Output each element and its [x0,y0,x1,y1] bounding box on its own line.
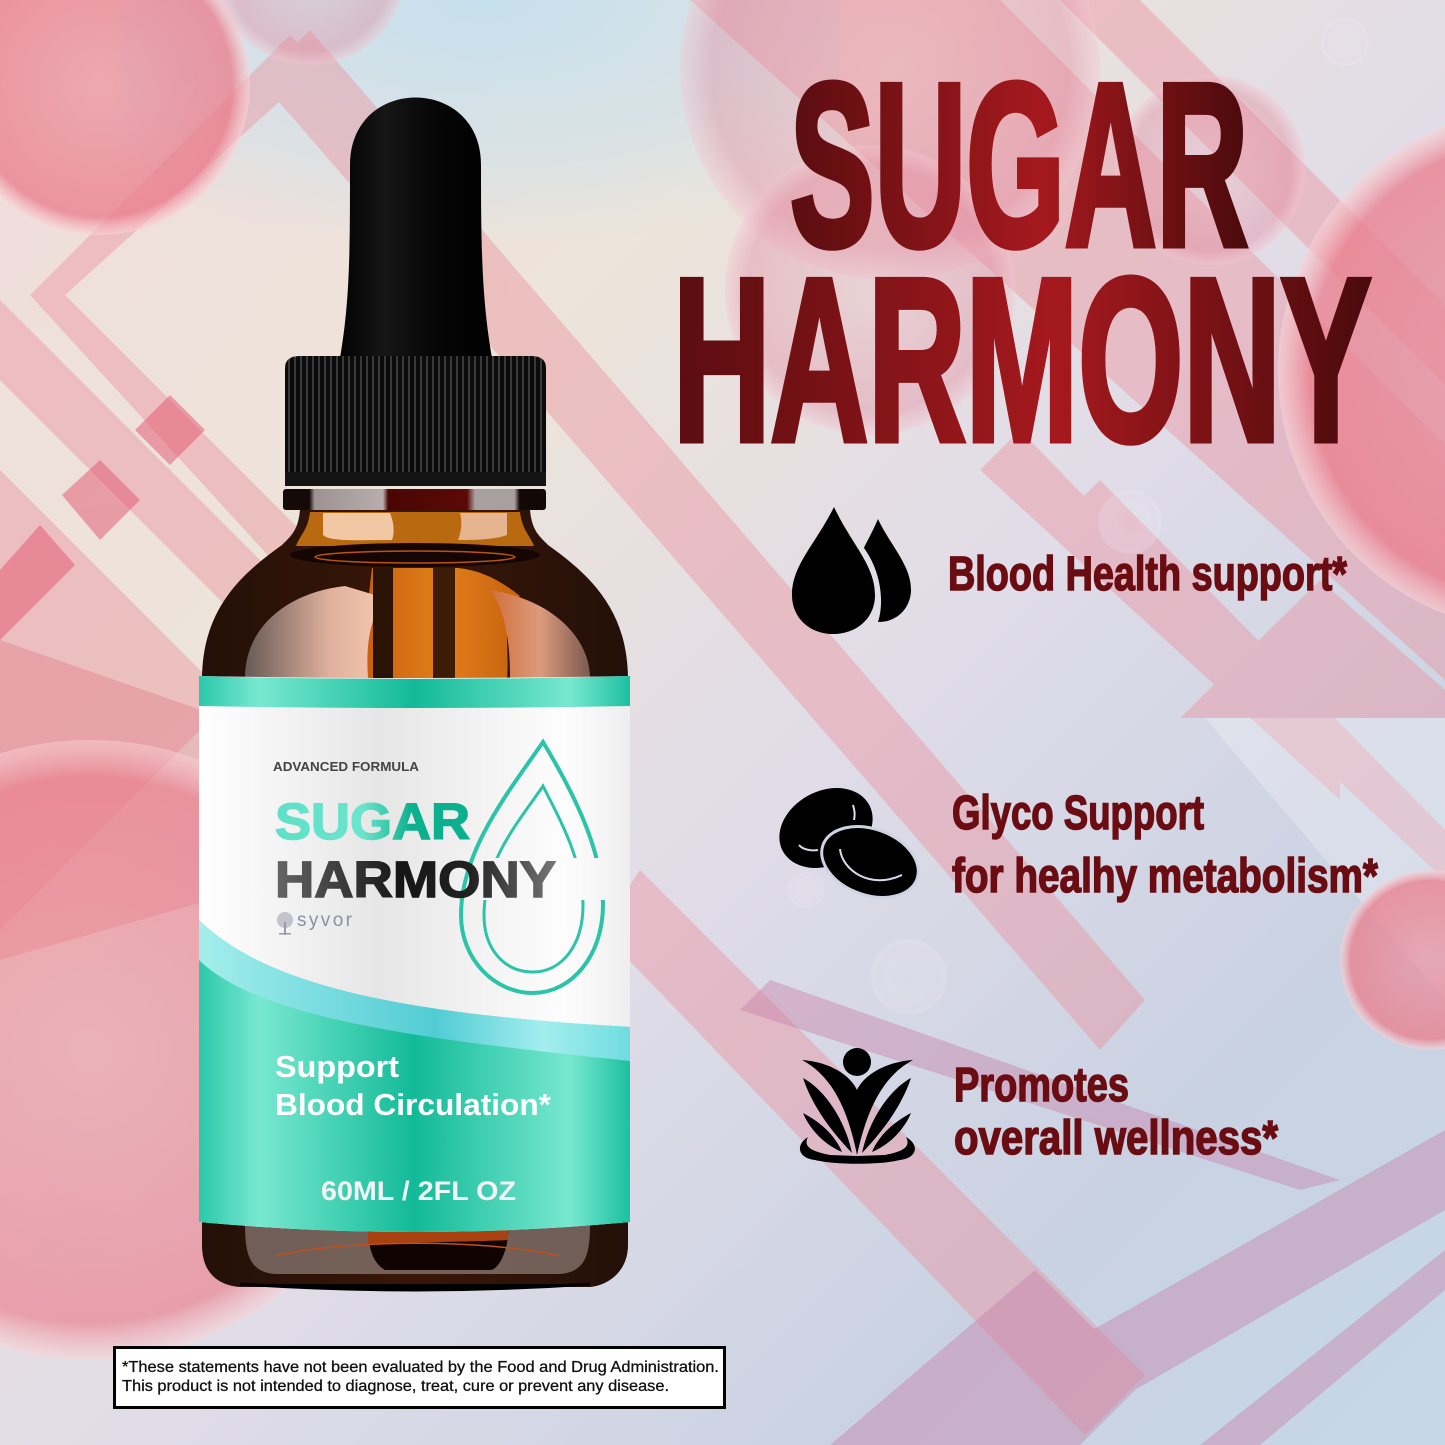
label drop logo [461,742,603,993]
label text: HARMONY [275,851,556,908]
label text: ADVANCED FORMULA [273,760,419,774]
title [673,36,1371,490]
neck highlights [296,512,534,546]
icon: wellness figure [800,1048,915,1164]
label text: Blood Circulation* [275,1087,552,1122]
label text: syvor [297,910,353,931]
disclaimer box: *These statements have not been evaluated by the Food and Drug Administration. [122,1359,719,1376]
benefit: blood health: Blood Health support* [948,548,1347,601]
amber liquid [365,568,520,680]
label text: 60ML / 2FL OZ [321,1176,516,1206]
bottle label [199,676,630,1232]
benefit: blood health [792,507,1347,634]
disclaimer box: This product is not intended to diagnose, treat, cure or prevent any disease. [122,1378,669,1395]
icon: syvor tree [277,912,293,935]
label text [273,760,556,1206]
benefit: overall wellness [800,1048,1278,1165]
label text: SUGAR [275,793,470,850]
benefit: overall wellness: overall wellness* [954,1112,1278,1165]
icon: dropper bulb [340,98,492,358]
label text: Support [275,1049,399,1084]
benefit: glyco support [765,772,1378,910]
glass body [202,510,628,1290]
benefit: glyco support: Glyco Support [952,787,1204,840]
disclaimer box [114,1348,724,1408]
dropper cap [283,356,546,510]
bottom glass highlights [245,1225,590,1274]
icon: blood drops [792,507,911,634]
product: dropper bottle [199,98,630,1290]
benefit: overall wellness: Promotes [954,1059,1129,1112]
icon: blood cells [765,772,928,910]
